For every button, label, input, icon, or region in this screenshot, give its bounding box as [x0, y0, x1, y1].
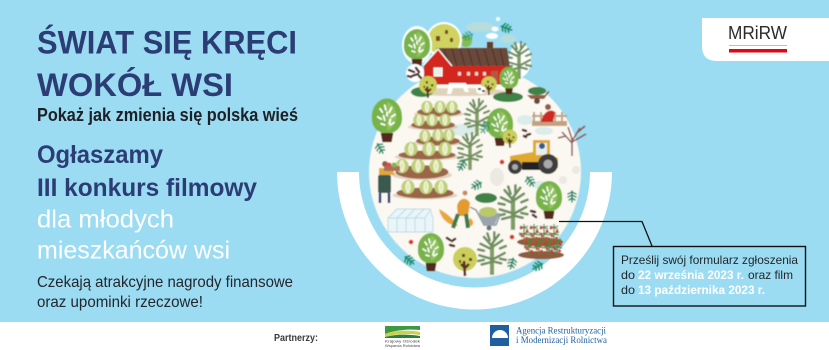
partners label: Partnerzy:: [274, 332, 318, 344]
gardener with wheelbarrow: [439, 190, 500, 230]
callout: submission deadlines: 13 października 2023 r.: [638, 283, 765, 297]
announcement heading: dla młodych: [37, 206, 174, 234]
prizes text: oraz upominki rzeczowe!: [37, 294, 203, 311]
prizes text: Czekają atrakcyjne nagrody finansowe: [37, 274, 293, 291]
farmer at fence: [532, 104, 567, 126]
bare tree: [558, 126, 586, 156]
subtitle: Pokaż jak zmienia się polska wieś: [37, 105, 298, 125]
dark bush: [475, 193, 497, 203]
callout: submission deadlines: do: [621, 283, 635, 297]
wheelbarrow with plants: [527, 87, 550, 104]
ground circle: [369, 66, 581, 278]
village illustration: [369, 17, 586, 278]
title: WOKÓŁ WSI: [37, 67, 233, 103]
tomato beds: [517, 224, 564, 259]
person with fruit crate: [378, 161, 400, 203]
title: [37, 24, 297, 103]
footer band: [0, 322, 829, 350]
leaves and berries: [374, 23, 576, 272]
logo: KOWR: [385, 326, 421, 348]
logo: ARiMR: Agencja Restrukturyzacji: [516, 326, 606, 336]
logo: MRiRW: MRiRW: [728, 23, 787, 43]
logo: ARiMR: i Modernizacji Rolnictwa: [516, 336, 608, 346]
red barn: [423, 42, 510, 84]
title: ŚWIAT SIĘ KRĘCI: [37, 24, 297, 60]
leader line: [559, 222, 652, 246]
pale ground patches: [450, 115, 553, 189]
announcement heading: mieszkańców wsi: [37, 236, 230, 264]
tractor: [508, 140, 558, 174]
callout: submission deadlines: [614, 246, 806, 306]
clouds: [466, 17, 516, 43]
white arc behind illustration: [337, 172, 612, 310]
chickens: [490, 166, 580, 186]
cabbage beds: [392, 101, 464, 199]
announcement heading: [37, 141, 257, 264]
callout: submission deadlines: 22 września 2023 r.: [638, 268, 744, 282]
prizes text: [37, 274, 293, 311]
announcement heading: III konkurs filmowy: [37, 174, 257, 202]
logo: ARiMR: [490, 325, 608, 346]
yard: [410, 67, 523, 102]
logo: KOWR: Wsparcia Rolnictwa: [385, 343, 421, 348]
background trees: [402, 22, 531, 82]
callout: submission deadlines: do: [621, 268, 635, 282]
callout: submission deadlines: oraz film: [748, 268, 793, 282]
announcement heading: Ogłaszamy: [37, 141, 163, 169]
logo: MRiRW: [702, 18, 829, 61]
trees on the field: [372, 98, 562, 276]
logo: KOWR: Krajowy Ośrodek: [385, 338, 420, 344]
greenhouse: [388, 209, 433, 232]
callout: submission deadlines: Prześlij swój formularz zgłoszenia: [621, 253, 798, 267]
